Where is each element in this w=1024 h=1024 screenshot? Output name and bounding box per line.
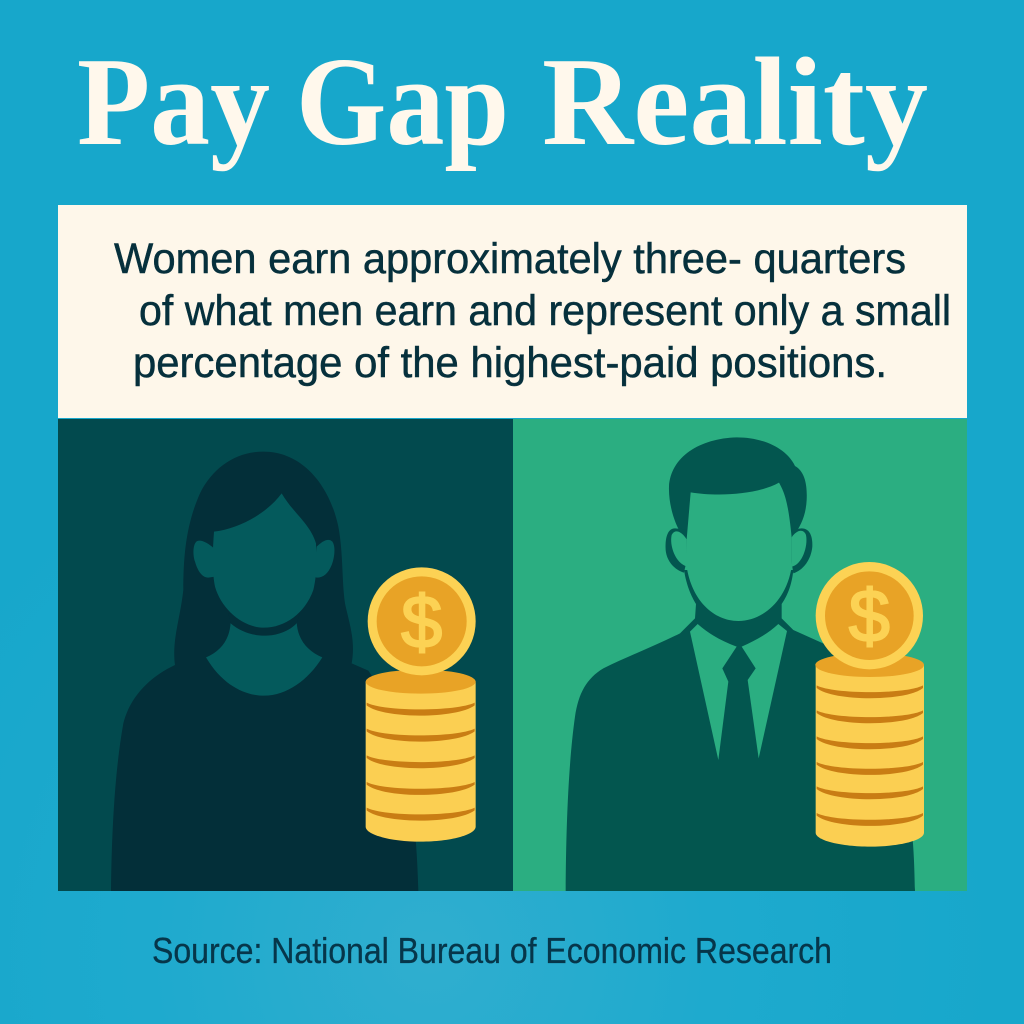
icon: coin stack, men: $ <box>849 574 890 657</box>
title: Gap <box>296 33 509 172</box>
icon: woman silhouette <box>111 452 418 891</box>
title: Pay <box>77 33 270 172</box>
panel: women <box>58 419 513 891</box>
title: Reality <box>542 33 928 172</box>
icon: coin stack, men <box>815 562 924 847</box>
statement line 2: of what men earn and represent only a small <box>139 287 951 335</box>
icon: man silhouette <box>566 437 915 891</box>
statement line 1: Women earn approximately three- quarters <box>114 235 906 283</box>
panel: statement <box>58 205 967 418</box>
panel: men <box>513 419 967 891</box>
statement line 3: percentage of the highest-paid positions. <box>133 339 887 387</box>
source note: Source: National Bureau of Economic Research <box>152 930 832 971</box>
icon: coin stack, women: $ <box>401 580 442 663</box>
icon: coin stack, women <box>366 567 476 842</box>
